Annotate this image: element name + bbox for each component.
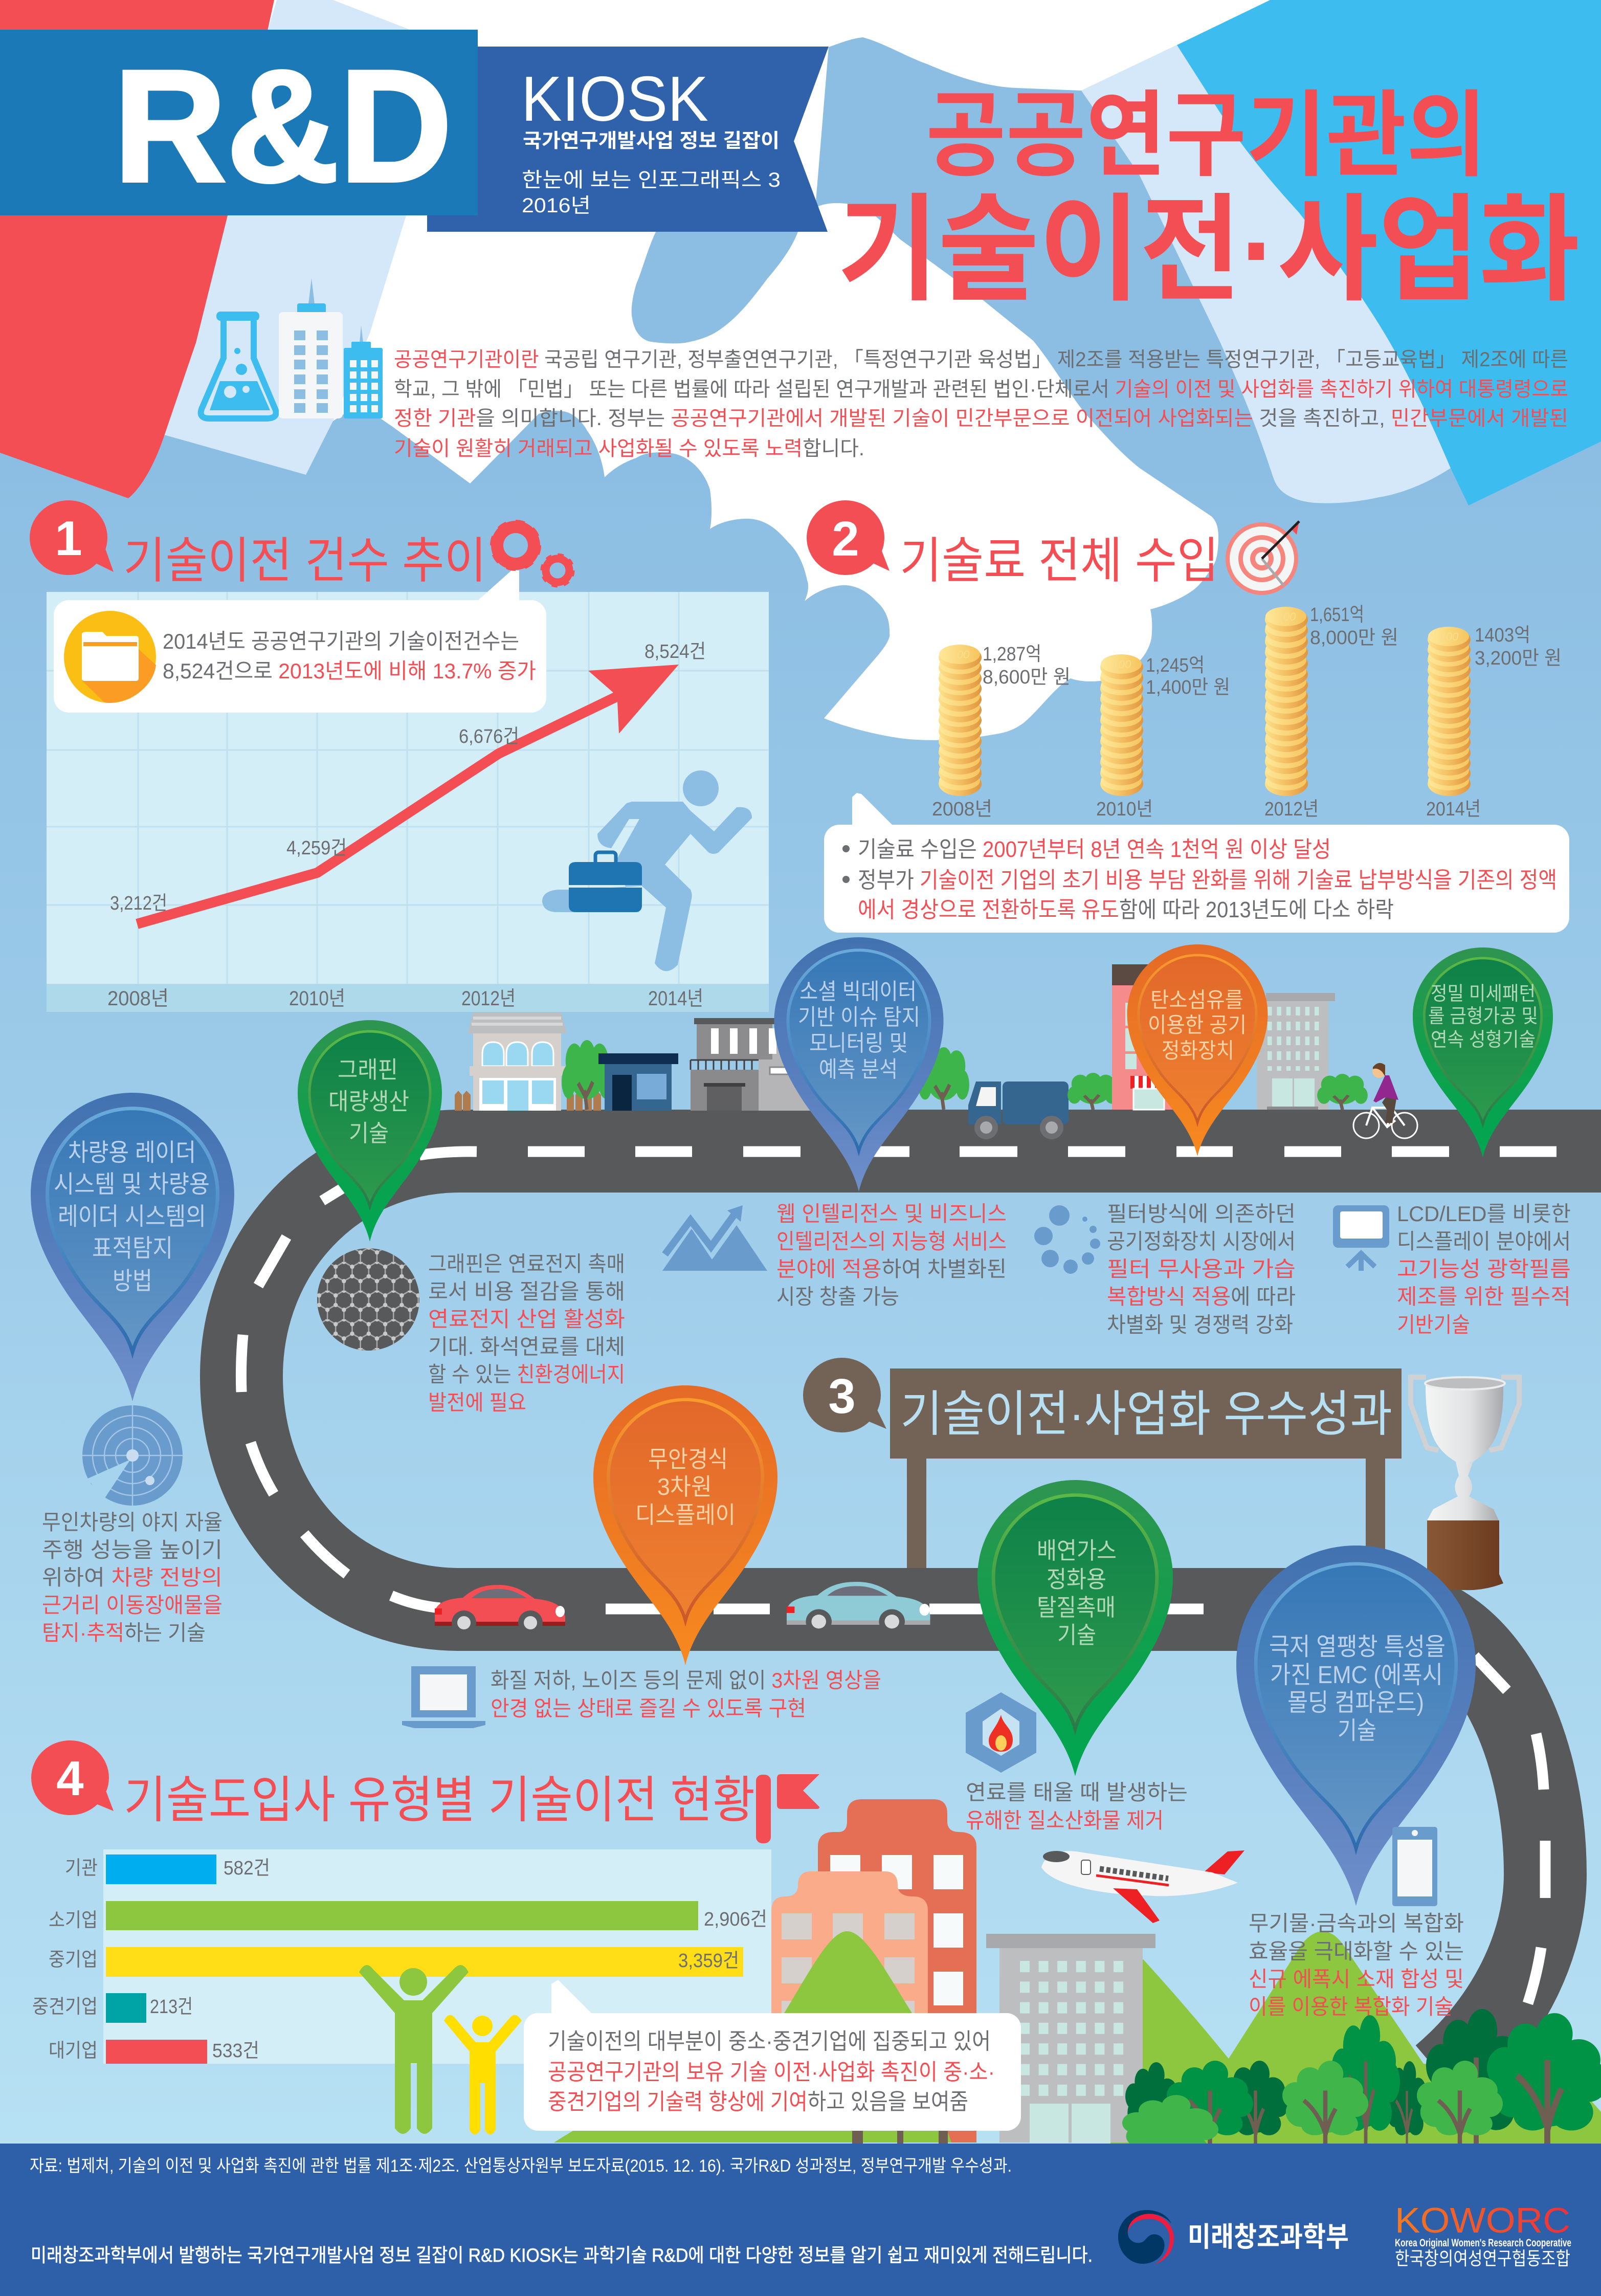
LCD text: 제조를 위한 필수적 (1397, 1285, 1571, 1309)
graphene text: 할 수 있는 친환경에너지 (428, 1362, 625, 1386)
coin stack 2014 (1428, 627, 1471, 796)
bar: 중기업: 중기업 (49, 1949, 98, 1971)
pin: vehicle radar: 방법 (113, 1268, 152, 1295)
chart value labels: 4,259건 (286, 837, 347, 859)
intro text: 정한 기관을 의미합니다. 정부는 공공연구기관에서 개발된 기술이 민간부문으로 이전되어 사업화되는 것을 촉진하고, 민간부문에서 개발된 (394, 407, 1568, 430)
pink building (1112, 964, 1186, 1110)
pin: micro pattern: 연속 성형기술 (1431, 1029, 1536, 1051)
icon: yellow person (444, 2015, 522, 2134)
chart year labels: 2010년 (289, 987, 345, 1010)
graphene text: 기대. 화석연료를 대체 (428, 1335, 625, 1359)
road (241, 1151, 1601, 2077)
coin stack 2012 (1265, 607, 1308, 796)
pin: exhaust gas (977, 1480, 1173, 1776)
bar: 기관 (65, 1855, 270, 1884)
header: KIOSK banner (427, 47, 829, 232)
bar: 소기업: 소기업 (49, 1910, 98, 1931)
pin: exhaust gas: 정화용 (1047, 1566, 1106, 1593)
coin value labels: 8,600만 원 (983, 667, 1071, 688)
footer (0, 2144, 1601, 2296)
icon: green person (359, 1965, 469, 2134)
small mountain in front of the peach building (554, 1931, 951, 2143)
section 4 callout: 중견기업의 기술력 향상에 기여하고 있음을 보여줌 (548, 2089, 968, 2114)
red car (435, 1585, 565, 1635)
section 4 callout: 공공연구기관의 보유 기술 이전·사업화 촉진이 중·소· (548, 2060, 995, 2085)
icon: mountain chart (662, 1205, 767, 1271)
EMC text: 효율을 극대화할 수 있는 (1249, 1939, 1464, 1963)
icon: flag (756, 1774, 819, 1843)
pin: micro pattern: 정밀 미세패턴 (1431, 983, 1536, 1005)
coin value labels: 1403억 (1475, 625, 1530, 646)
section 4 heading (31, 1740, 755, 1828)
coin year labels: 2008년 (932, 799, 992, 820)
air purifier text: 필터방식에 의존하던 (1107, 1202, 1296, 1226)
section 2 callout (824, 793, 1569, 933)
pin: vehicle radar: 표적탐지 (92, 1235, 173, 1262)
pin: glasses-free 3D: 디스플레이 (635, 1502, 736, 1528)
house (468, 1012, 567, 1111)
tree (1068, 1073, 1119, 1110)
bar: 소기업: 2,906건 (704, 1909, 767, 1930)
chart year labels (107, 987, 703, 1010)
cover for forest below the page band (0, 2144, 1601, 2164)
EMC text: 신규 에폭시 소재 합성 및 (1249, 1967, 1464, 1991)
pin: carbon fiber: 이용한 공기 (1148, 1013, 1247, 1037)
graphene text: 발전에 필요 (428, 1390, 526, 1415)
icon: gears (493, 523, 572, 585)
coin stack 2010: 100 (1113, 658, 1131, 671)
bar: 대기업: 대기업 (49, 2040, 98, 2062)
pin: EMC (1236, 1546, 1476, 1906)
header: KIOSK banner: 국가연구개발사업 정보 길잡이 (523, 130, 780, 152)
intro text: 기술이 원활히 거래되고 사업화될 수 있도록 노력합니다. (394, 437, 864, 460)
logo: KOWORC (1395, 2200, 1571, 2269)
pin: exhaust gas: 기술 (1057, 1622, 1096, 1648)
cyclist (1353, 1063, 1417, 1138)
icon: radar (82, 1405, 183, 1509)
chart year labels: 2012년 (461, 987, 516, 1010)
section 1 callout (54, 570, 546, 713)
pin: social big data: 기반 이슈 탐지 (798, 1005, 920, 1030)
header: R&D blue banner: R&D (114, 37, 452, 215)
coin value labels: 3,200만 원 (1475, 648, 1562, 669)
NOx text (966, 1780, 1188, 1833)
air purifier text: 필터 무사용과 가습 (1107, 1257, 1296, 1281)
pin: graphene: 그래핀 (338, 1056, 398, 1083)
icon: trophy (1411, 1377, 1519, 1590)
bar: 기관: 582건 (224, 1858, 270, 1879)
grey office (1257, 993, 1335, 1110)
small trunks below the callout (852, 2131, 948, 2144)
graphene text: 연료전지 산업 활성화 (428, 1307, 625, 1331)
intro text: 학교, 그 밖에 「민법」 또는 다른 법률에 따라 설립된 연구개발과 관련된 법인·단체로서 기술의 이전 및 사업화를 촉진하기 위하여 대통령령으로 (394, 378, 1568, 401)
section 4 callout: 기술이전의 대부분이 중소·중견기업에 집중되고 있어 (548, 2029, 991, 2054)
coin year labels (932, 799, 1481, 820)
building: grey tower (986, 1934, 1155, 2144)
footer: 미래창조과학부 (1188, 2222, 1349, 2253)
coin stack 2014: 100 (1440, 630, 1459, 643)
NOx text: 유해한 질소산화물 제거 (966, 1808, 1164, 1833)
icon: phone (1392, 1827, 1437, 1906)
section 3 heading sign (803, 1358, 1402, 1568)
LCD text: 고기능성 광학필름 (1397, 1257, 1571, 1281)
coin value labels: 1,651억 (1310, 604, 1364, 626)
section 1 heading: 기술이전 건수 추이 (123, 534, 486, 588)
icon: dots loader (1034, 1205, 1100, 1274)
section 1 callout: 8,524건으로 2013년도에 비해 13.7% 증가 (163, 659, 536, 683)
pin: EMC: 가진 EMC (에폭시 (1270, 1662, 1443, 1689)
EMC text: 이를 이용한 복합화 기술 (1249, 1995, 1453, 2019)
bar: 중견기업: 중견기업 (32, 1996, 98, 2018)
graphene text: 로서 비용 절감을 통해 (428, 1279, 625, 1304)
icon: flask and buildings (201, 278, 383, 418)
pin: micro pattern (1413, 947, 1553, 1157)
blue shop (598, 1053, 678, 1111)
graphene text (428, 1252, 625, 1415)
chart value labels: 6,676건 (459, 726, 519, 747)
building: red-orange (818, 1799, 976, 2143)
LCD text (1397, 1202, 1571, 1337)
EMC text: 무기물·금속과의 복합화 (1249, 1911, 1464, 1935)
pin: glasses-free 3D (593, 1385, 777, 1665)
big data text: 인텔리전스의 지능형 서비스 (776, 1229, 1007, 1253)
header: KIOSK banner: KIOSK (521, 64, 708, 135)
pin: vehicle radar: 시스템 및 차량용 (54, 1171, 210, 1198)
coin year labels: 2010년 (1096, 799, 1153, 820)
pin: glasses-free 3D: 무안경식 (648, 1446, 728, 1472)
section 1 heading: 1 (55, 511, 82, 566)
air purifier text: 공기정화장치 시장에서 (1107, 1229, 1296, 1253)
big data text: 시장 창출 가능 (776, 1285, 899, 1309)
pin: vehicle radar: 차량용 레이더 (68, 1139, 196, 1166)
pin: social big data: 예측 분석 (819, 1057, 898, 1082)
section 2 heading: 2 (832, 512, 859, 566)
tree (562, 1040, 612, 1110)
coin bar chart (932, 604, 1562, 820)
bar chart (32, 1849, 771, 2064)
icon: airplane (1041, 1850, 1244, 1923)
NOx text: 연료를 태울 때 발생하는 (966, 1780, 1188, 1804)
pin: social big data: 모니터링 및 (809, 1031, 908, 1056)
logo: KOWORC: KOWORC (1395, 2200, 1570, 2240)
tree (918, 1047, 969, 1110)
logo: ministry taegeuk (1118, 2210, 1174, 2264)
section 3 heading sign: 기술이전·사업화 우수성과 (900, 1387, 1392, 1442)
pin: exhaust gas: 탈질촉매 (1037, 1594, 1116, 1621)
pin: vehicle radar (31, 1093, 234, 1401)
section 4 heading: 기술도입사 유형별 기술이전 현황 (124, 1772, 755, 1828)
pin: carbon fiber (1127, 944, 1268, 1156)
truck (968, 1081, 1069, 1139)
cars on the road (435, 1582, 930, 1635)
LCD text: 기반기술 (1397, 1313, 1470, 1337)
bar: 중기업: 3,359건 (678, 1950, 739, 1972)
air purifier text: 복합방식 적용에 따라 (1107, 1285, 1296, 1309)
coin stack 2010 (1100, 654, 1143, 796)
chart year labels: 2014년 (648, 987, 703, 1010)
coin value labels: 1,245억 (1146, 655, 1205, 676)
intro text: 공공연구기관이란 국공립 연구기관, 정부출연연구기관, 「특정연구기관 육성법」 제2조를 적용받는 특정연구기관, 「고등교육법」 제2조에 따른 (394, 348, 1568, 371)
header: KIOSK banner: 한눈에 보는 인포그래픽스 3 (522, 169, 781, 191)
pin: vehicle radar: 레이더 시스템의 (58, 1203, 206, 1230)
air purifier text (1107, 1202, 1296, 1337)
header: R&D blue banner (0, 30, 478, 215)
section 2 heading: 기술료 전체 수입 (900, 534, 1219, 588)
graphene lattice image (317, 1248, 419, 1351)
bar: 중견기업: 213건 (150, 1996, 193, 2018)
chart year labels: 2008년 (107, 987, 169, 1010)
pin: EMC: 기술 (1338, 1717, 1376, 1745)
big data text: 분야에 적용하여 차별화된 (776, 1257, 1007, 1281)
radar text: 무인차량의 야지 자율 (42, 1510, 223, 1534)
roadside houses (455, 964, 1417, 1139)
LCD text: LCD/LED를 비롯한 (1397, 1202, 1571, 1226)
coin value labels: 1,400만 원 (1146, 677, 1230, 698)
tree (1317, 1074, 1368, 1110)
section 3 heading sign: 3 (828, 1369, 856, 1424)
coin value labels (983, 604, 1562, 698)
radar text: 주행 성능을 높이기 (42, 1538, 223, 1562)
city and mountains at the bottom (554, 1799, 1601, 2144)
pin: graphene: 기술 (349, 1120, 389, 1146)
bar: 대기업 (49, 2040, 259, 2064)
section 2 callout: 기술료 수입은 2007년부터 8년 연속 1천억 원 이상 달성 (858, 837, 1331, 862)
chart value labels: 3,212건 (110, 893, 167, 914)
bar: 대기업: 533건 (212, 2040, 259, 2062)
radar text: 위하여 차량 전방의 (42, 1565, 223, 1589)
header: KIOSK banner: 2016년 (522, 194, 591, 217)
bar: 소기업 (49, 1901, 767, 1931)
teal car (787, 1582, 930, 1634)
radar text: 근거리 이동장애물을 (42, 1593, 223, 1617)
icon: folder (64, 611, 156, 703)
coin stack 2008 (939, 645, 982, 796)
icon: laptop (402, 1666, 485, 1728)
pin: carbon fiber: 탄소섬유를 (1150, 988, 1243, 1012)
bar: 기관: 기관 (65, 1858, 98, 1879)
pin: social big data: 소셜 빅데이터 (799, 979, 917, 1004)
LCD text: 디스플레이 분야에서 (1397, 1229, 1571, 1253)
section 4 heading: 4 (56, 1751, 84, 1806)
big data text: 웹 인텔리전스 및 비즈니스 (776, 1202, 1007, 1226)
icon: flame hexagon (966, 1692, 1036, 1773)
pin: exhaust gas: 배연가스 (1037, 1537, 1117, 1564)
pin: EMC: 극저 열팽창 특성을 (1269, 1633, 1446, 1661)
bar: 중기업 (49, 1947, 743, 1977)
section 1 callout: 2014년도 공공연구기관의 기술이전건수는 (163, 629, 519, 653)
section 2 heading (807, 500, 1219, 588)
pin: micro pattern: 롤 금형가공 및 (1428, 1006, 1538, 1027)
pin: graphene: 대량생산 (328, 1088, 409, 1115)
pin: social big data (774, 937, 944, 1191)
building: peach (771, 1871, 928, 2143)
main title: 기술이전·사업화 (837, 186, 1580, 315)
3D display text: 화질 저하, 노이즈 등의 문제 없이 3차원 영상을 (491, 1668, 881, 1692)
coin year labels: 2012년 (1264, 799, 1319, 820)
pin: carbon fiber: 정화장치 (1162, 1039, 1234, 1063)
coin stack 2008: 100 (951, 648, 970, 661)
coin value labels: 1,287억 (983, 644, 1041, 665)
logo: KOWORC: 한국창의여성연구협동조합 (1395, 2248, 1570, 2269)
radar text (42, 1510, 223, 1645)
EMC text (1249, 1911, 1464, 2019)
pin: EMC: 몰딩 컴파운드) (1287, 1689, 1424, 1716)
fences (455, 1091, 601, 1111)
runner icon (542, 770, 752, 971)
radar text: 탐지·추적하는 기술 (42, 1621, 206, 1645)
graphene text: 그래핀은 연료전지 촉매 (428, 1252, 625, 1276)
main title (837, 83, 1580, 315)
section 1 chart panel (47, 592, 769, 1012)
3D display text: 안경 없는 상태로 즐길 수 있도록 구현 (491, 1696, 806, 1720)
bar: 중견기업 (32, 1993, 193, 2023)
footer: 자료: 법제처, 기술의 이전 및 사업화 촉진에 관한 법률 제1조·제2조. 산업통상자원부 보도자료(2015. 12. 16). 국가R&D 성과정보, 정부연구개발 우수성과. (30, 2156, 1012, 2176)
line chart arrow (137, 665, 679, 924)
pin: graphene (298, 1020, 442, 1242)
pin: glasses-free 3D: 3차원 (657, 1473, 712, 1500)
coin value labels: 8,000만 원 (1310, 627, 1398, 649)
forest (1122, 2009, 1601, 2155)
section 1 heading (30, 500, 486, 588)
footer: 미래창조과학부에서 발행하는 국가연구개발사업 정보 길잡이 R&D KIOSK는 과학기술 R&D에 대한 다양한 정보를 알기 쉽고 재미있게 전해드립니다. (31, 2245, 1093, 2266)
icon: target (1226, 521, 1299, 595)
section 4 callout (524, 1980, 1021, 2131)
3D display text (491, 1668, 881, 1720)
chart value labels: 8,524건 (644, 641, 706, 663)
coin year labels: 2014년 (1426, 799, 1481, 820)
chart value labels (110, 641, 706, 914)
intro text (394, 348, 1568, 460)
coin stack 2012: 100 (1277, 610, 1296, 623)
main title: 공공연구기관의 (926, 83, 1486, 188)
section 2 callout: 에서 경상으로 전환하도록 유도함에 따라 2013년도에 다소 하락 (858, 897, 1394, 922)
grey house (691, 1018, 880, 1111)
air purifier text: 차별화 및 경쟁력 강화 (1107, 1313, 1293, 1337)
icon: briefcase (569, 852, 642, 912)
big data text (776, 1202, 1007, 1309)
icon: monitor (1333, 1205, 1389, 1271)
